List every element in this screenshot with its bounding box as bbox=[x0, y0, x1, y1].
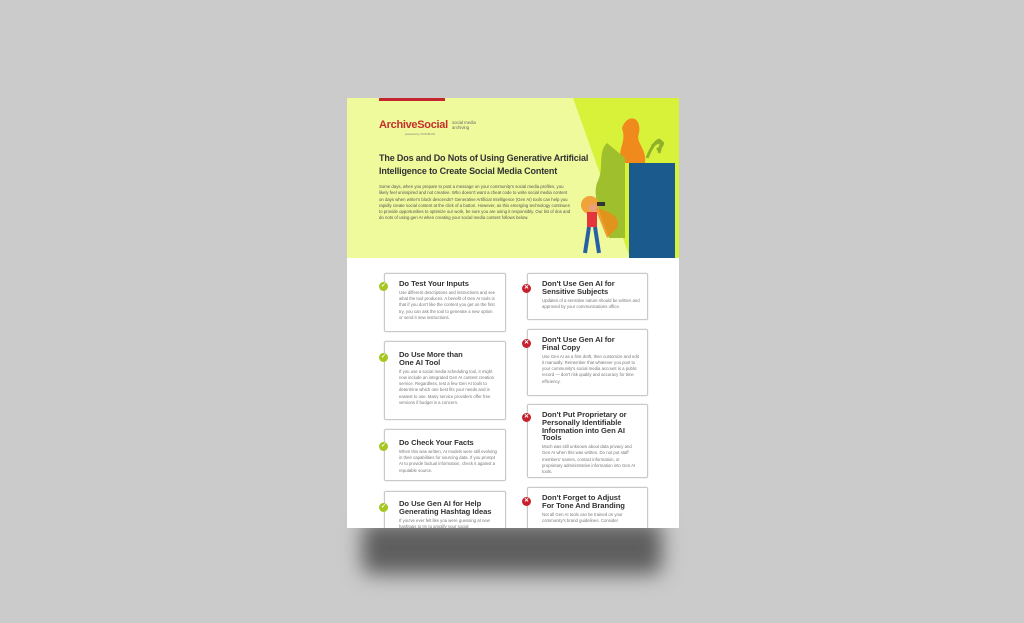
logo: social media bbox=[452, 120, 476, 125]
icon: x: ✕ bbox=[524, 285, 529, 291]
red accent bar bbox=[379, 98, 445, 101]
card: hashtags bbox=[384, 491, 506, 541]
card: sensitive subjects: Don't Use Gen AI for Sensitive Subjects bbox=[542, 279, 615, 296]
header band bbox=[347, 98, 679, 258]
card: tone and branding: Not all Gen AI tools can be trained on your community's brand guidelines. Consider bbox=[542, 512, 623, 523]
card: proprietary info bbox=[527, 404, 648, 478]
card: check facts: Do Check Your Facts bbox=[399, 438, 474, 447]
document page bbox=[347, 98, 679, 528]
logo: powered by CIVICPLUS bbox=[405, 132, 435, 136]
card: sensitive subjects: Updates of a sensitive nature should be written and approved by your communications office. bbox=[542, 298, 640, 309]
icon: x: ✕ bbox=[524, 340, 529, 346]
logo: ArchiveSocial bbox=[379, 119, 448, 131]
icon: check: ✓ bbox=[381, 283, 386, 289]
card: final copy: Use Gen AI as a first draft, then customize and edit it manually. Remember that whatever you post to your community's social media account is a public record — don't risk quality and accuracy for time efficiency. bbox=[542, 354, 639, 384]
card: more than one tool: Do Use More than One AI Tool bbox=[399, 350, 463, 367]
card: final copy bbox=[527, 329, 648, 396]
card: tone and branding bbox=[527, 487, 648, 537]
card: tone and branding: Don't Forget to Adjust For Tone And Branding bbox=[542, 493, 625, 510]
icon: x: ✕ bbox=[524, 498, 529, 504]
icon: check bbox=[379, 442, 388, 451]
card: do test inputs bbox=[384, 273, 506, 332]
card: check facts bbox=[384, 429, 506, 481]
card: check facts: When this was written, AI models were still evolving in their capabilities for sourcing data. If you prompt AI to provide factual information, check it against a reputable source. bbox=[399, 449, 497, 473]
card: final copy: Don't Use Gen AI for Final Copy bbox=[542, 335, 615, 352]
icon: x: ✕ bbox=[524, 414, 529, 420]
lime diagonal background bbox=[573, 98, 679, 258]
card: do test inputs: Use different descriptions and instructions and see what the tool produces. A benefit of Gen AI tools is that if you don't like the content you get on the first try, you can ask the tool to generate a new option or send it new instructions. bbox=[399, 290, 495, 320]
icon: check: ✓ bbox=[381, 443, 386, 449]
card: do test inputs: Do Test Your Inputs bbox=[399, 279, 469, 288]
icon: check bbox=[379, 503, 388, 512]
title: The Dos and Do Nots of Using Generative Artificial Intelligence to Create Social Media Content bbox=[379, 153, 588, 176]
card: proprietary info: Don't Put Proprietary or Personally Identifiable Information into Gen AI Tools bbox=[542, 410, 627, 442]
card: more than one tool: If you use a social media scheduling tool, it might now include an integrated Gen AI content creation service. Regardless, test a few Gen AI tools to determine which one best fits your needs and is easiest to use. Many service providers offer free versions if budget is a concern. bbox=[399, 369, 494, 405]
icon: check bbox=[379, 353, 388, 362]
icon: x bbox=[522, 497, 531, 506]
card: hashtags: Do Use Gen AI for Help Generating Hashtag Ideas bbox=[399, 499, 491, 516]
card: sensitive subjects bbox=[527, 273, 648, 320]
card: proprietary info: Much was still unknown about data privacy and Gen AI when this was written. Do not put staff members' names, contact information, or proprietary administrative information into Gen AI tools. bbox=[542, 444, 635, 474]
document shadow bbox=[362, 522, 662, 574]
icon: x bbox=[522, 284, 531, 293]
icon: x bbox=[522, 413, 531, 422]
icon: check bbox=[379, 282, 388, 291]
icon: check: ✓ bbox=[381, 354, 386, 360]
illustration: plants and tower with person bbox=[581, 118, 675, 258]
logo bbox=[379, 119, 476, 136]
icon: check: ✓ bbox=[381, 504, 386, 510]
card: more than one tool bbox=[384, 341, 506, 420]
logo: archiving bbox=[452, 125, 469, 130]
icon: x bbox=[522, 339, 531, 348]
intro paragraph: Some days, when you prepare to post a message on your community's social media profiles, you likely feel uninspired and not creative. Who doesn't want a cheat code to write social media content on days when writer's block descends? Generative Artificial Intelligence (Gen AI) tools can help you rapidly create social content at the click of a button. However, as this emerging technology continues to provide opportunities to optimize our work, be sure you are using it responsibly. Our list of dos and do nots of using gen AI when creating your social media content follows below. bbox=[379, 184, 570, 220]
